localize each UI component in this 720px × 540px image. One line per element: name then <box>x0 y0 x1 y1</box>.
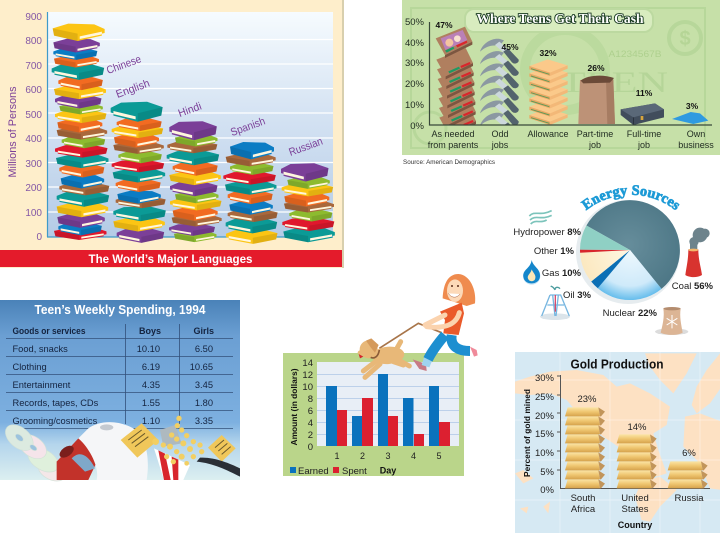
panel: world's major languages <box>0 0 344 268</box>
pictograph: allowance bills <box>529 59 568 125</box>
map land <box>515 353 720 522</box>
axes <box>430 22 712 125</box>
banknote decoration <box>411 8 705 148</box>
country labels: Russia <box>674 493 704 504</box>
table rows: 1.80 <box>195 398 213 408</box>
table rows: 6.50 <box>195 344 213 354</box>
panel: energy sources pie <box>513 185 714 335</box>
pictograph: briefcase <box>621 103 664 125</box>
table rows: 6.19 <box>142 362 160 372</box>
axis tick labels: 50% <box>405 17 425 28</box>
pie labels: Hydropower 8% <box>513 227 582 238</box>
table rows: Clothing <box>12 362 47 372</box>
table rows: 4.35 <box>142 380 160 390</box>
illustration: CDs, dryer, tickets, popcorn, comb <box>1 416 240 485</box>
value labels: 14% <box>627 422 647 433</box>
category labels: business <box>678 140 714 150</box>
category labels: Odd <box>491 129 509 139</box>
category labels: job <box>637 140 650 150</box>
language labels: Chinese <box>105 53 143 77</box>
axis tick labels: 0% <box>540 485 555 496</box>
illustration: girl walking dog <box>358 274 478 377</box>
chart title: The World’s Major Languages <box>88 252 253 266</box>
axis tick labels <box>405 17 425 132</box>
country labels: Africa <box>571 504 596 515</box>
value labels: 32% <box>539 48 557 58</box>
pie labels: Other 1% <box>534 246 575 257</box>
table rows: 3.45 <box>195 380 213 390</box>
x axis labels: 3 <box>385 451 391 461</box>
category labels: Full-time <box>627 129 661 139</box>
pictograph: hammers <box>480 38 519 124</box>
y axis tick labels: 800 <box>25 36 42 47</box>
plot background <box>48 12 333 237</box>
y axis tick labels: 600 <box>25 85 42 96</box>
y axis labels: 14 <box>302 358 313 369</box>
language labels: English <box>114 78 151 101</box>
country labels <box>571 493 704 515</box>
pie labels: Oil 3% <box>563 290 592 301</box>
panel: where teens get their cash <box>402 0 720 155</box>
x axis labels <box>334 451 442 461</box>
y axis labels: 4 <box>308 418 313 429</box>
axis tick labels <box>535 373 555 496</box>
table rows: Entertainment <box>12 380 71 390</box>
x axis labels: 1 <box>334 451 340 461</box>
panel: where teens get their cash: TEEN <box>560 66 668 99</box>
pie chart <box>580 200 680 300</box>
y axis labels: 10 <box>302 382 313 393</box>
heading: Teen’s Weekly Spending, 1994 <box>34 303 206 317</box>
axis tick labels: 20% <box>535 411 555 422</box>
value labels: 11% <box>636 88 653 98</box>
source note: Source: American Demographics <box>403 159 495 166</box>
y axis labels: 2 <box>308 430 313 441</box>
table header: Goods or services <box>12 326 86 336</box>
axis tick labels: 10% <box>535 448 555 459</box>
dog <box>358 338 409 377</box>
y axis title: Amount (in dollars) <box>289 368 299 446</box>
axis tick labels: 25% <box>535 392 555 403</box>
x axis title: Country <box>618 520 652 530</box>
table rows: 1.55 <box>142 398 160 408</box>
category labels: jobs <box>491 140 509 150</box>
country labels: States <box>622 504 649 515</box>
category labels: Part-time <box>577 129 613 139</box>
axis tick labels: 20% <box>405 79 425 90</box>
category labels: Own <box>687 129 705 139</box>
table rows: 1.10 <box>142 416 160 426</box>
table rows: 3.35 <box>195 416 213 426</box>
panel: teen's weekly spending table <box>0 300 240 485</box>
y axis labels <box>302 358 313 453</box>
panel: where teens get their cash: $ <box>679 28 691 50</box>
legend <box>290 466 367 477</box>
icon: coal stack <box>685 228 710 277</box>
title bar <box>0 250 342 267</box>
language labels: Spanish <box>229 115 267 139</box>
table rows: 10.10 <box>137 344 160 354</box>
pie labels <box>513 227 714 319</box>
bars: earned <box>326 374 439 446</box>
pictograph: blue plan <box>672 112 708 124</box>
book stack: Spanish <box>223 142 278 244</box>
y axis labels: 0 <box>308 442 313 453</box>
axis tick labels: 30% <box>405 58 425 69</box>
y axis title: Percent of gold mined <box>522 389 532 477</box>
y axis labels: 6 <box>308 406 313 417</box>
country labels: United <box>621 493 649 504</box>
y axis tick labels: 500 <box>25 110 42 121</box>
y axis tick labels: 700 <box>25 61 42 72</box>
y axis tick labels: 400 <box>25 134 42 145</box>
axes <box>557 375 710 488</box>
panel: energy sources pie: Energy Sources <box>580 185 680 211</box>
table rows: Food, snacks <box>12 344 68 354</box>
axis tick labels: 30% <box>535 373 555 384</box>
pie labels: Coal 56% <box>672 281 714 292</box>
book stack: English <box>111 102 166 243</box>
language labels: Hindi <box>177 100 203 120</box>
axis tick labels: 5% <box>540 467 555 478</box>
language labels <box>105 53 324 159</box>
heading: Where Teens Get Their Cash <box>476 11 644 26</box>
legend: Earned <box>298 466 329 477</box>
axis tick labels: 10% <box>405 100 425 111</box>
panel: earned and spent bar chart <box>283 353 464 477</box>
book stack: Chinese <box>52 24 109 240</box>
book stack: Hindi <box>167 121 222 242</box>
axis tick labels: 40% <box>405 38 425 49</box>
gold bars: United States <box>617 434 657 488</box>
category labels: Allowance <box>527 129 569 139</box>
x axis labels: 2 <box>360 451 365 461</box>
y axis tick labels: 900 <box>25 12 42 23</box>
value labels: 6% <box>682 448 696 459</box>
value labels <box>435 20 699 111</box>
language labels: Russian <box>287 136 324 159</box>
table header: Boys <box>139 326 161 336</box>
pie labels: Nuclear 22% <box>603 308 658 319</box>
icon: water <box>529 211 552 224</box>
legend: Spent <box>342 466 367 477</box>
panel: gold production <box>515 352 720 533</box>
category labels: job <box>588 140 601 150</box>
x axis title: Day <box>380 466 396 476</box>
x axis labels: 4 <box>411 451 416 461</box>
country labels: South <box>571 493 595 504</box>
book stack: Russian <box>281 163 335 242</box>
value labels <box>577 394 696 459</box>
table rules <box>6 324 233 428</box>
table header: Girls <box>193 326 214 336</box>
category labels: As needed <box>431 129 475 139</box>
y axis tick labels: 300 <box>25 159 42 170</box>
axis tick labels: 15% <box>535 429 555 440</box>
pie shadow <box>576 200 680 304</box>
y axis tick labels: 200 <box>25 183 42 194</box>
y axis labels: 8 <box>308 394 313 405</box>
table rows <box>12 344 213 426</box>
category labels: from parents <box>428 140 479 150</box>
table rows: Grooming/cosmetics <box>12 416 98 426</box>
value labels: 47% <box>435 20 453 30</box>
table header <box>12 326 214 336</box>
table rows: 10.65 <box>190 362 213 372</box>
girl <box>413 274 478 371</box>
icon: gas flame <box>523 260 540 285</box>
y axis tick labels: 100 <box>25 208 42 219</box>
category labels <box>428 129 714 150</box>
y axis tick labels: 0 <box>36 232 42 243</box>
value labels: 45% <box>501 42 519 52</box>
title banner <box>465 9 653 32</box>
plot background <box>317 362 459 446</box>
pictograph: paper bag <box>578 76 615 124</box>
y axis labels: 12 <box>302 370 313 381</box>
panel: where teens get their cash: A1234567B <box>608 49 662 60</box>
axis tick labels: 0% <box>410 121 425 132</box>
value labels: 3% <box>686 101 699 111</box>
table rows: Records, tapes, CDs <box>12 398 99 408</box>
leash <box>379 323 442 348</box>
pictograph: wallets <box>436 26 476 124</box>
gold bars: Russia <box>668 461 708 488</box>
x axis labels: 5 <box>436 451 442 461</box>
bars: spent <box>337 398 450 446</box>
value labels: 23% <box>577 394 597 405</box>
y axis tick labels <box>25 12 42 243</box>
heading <box>578 195 684 218</box>
y axis title: Millions of Persons <box>7 86 19 178</box>
pie labels: Gas 10% <box>542 268 582 279</box>
heading: Gold Production <box>570 358 664 372</box>
icon: nuclear tower <box>655 307 688 335</box>
gold bars: South Africa <box>565 407 605 488</box>
icon: oil rig <box>540 286 570 320</box>
value labels: 26% <box>587 63 605 73</box>
